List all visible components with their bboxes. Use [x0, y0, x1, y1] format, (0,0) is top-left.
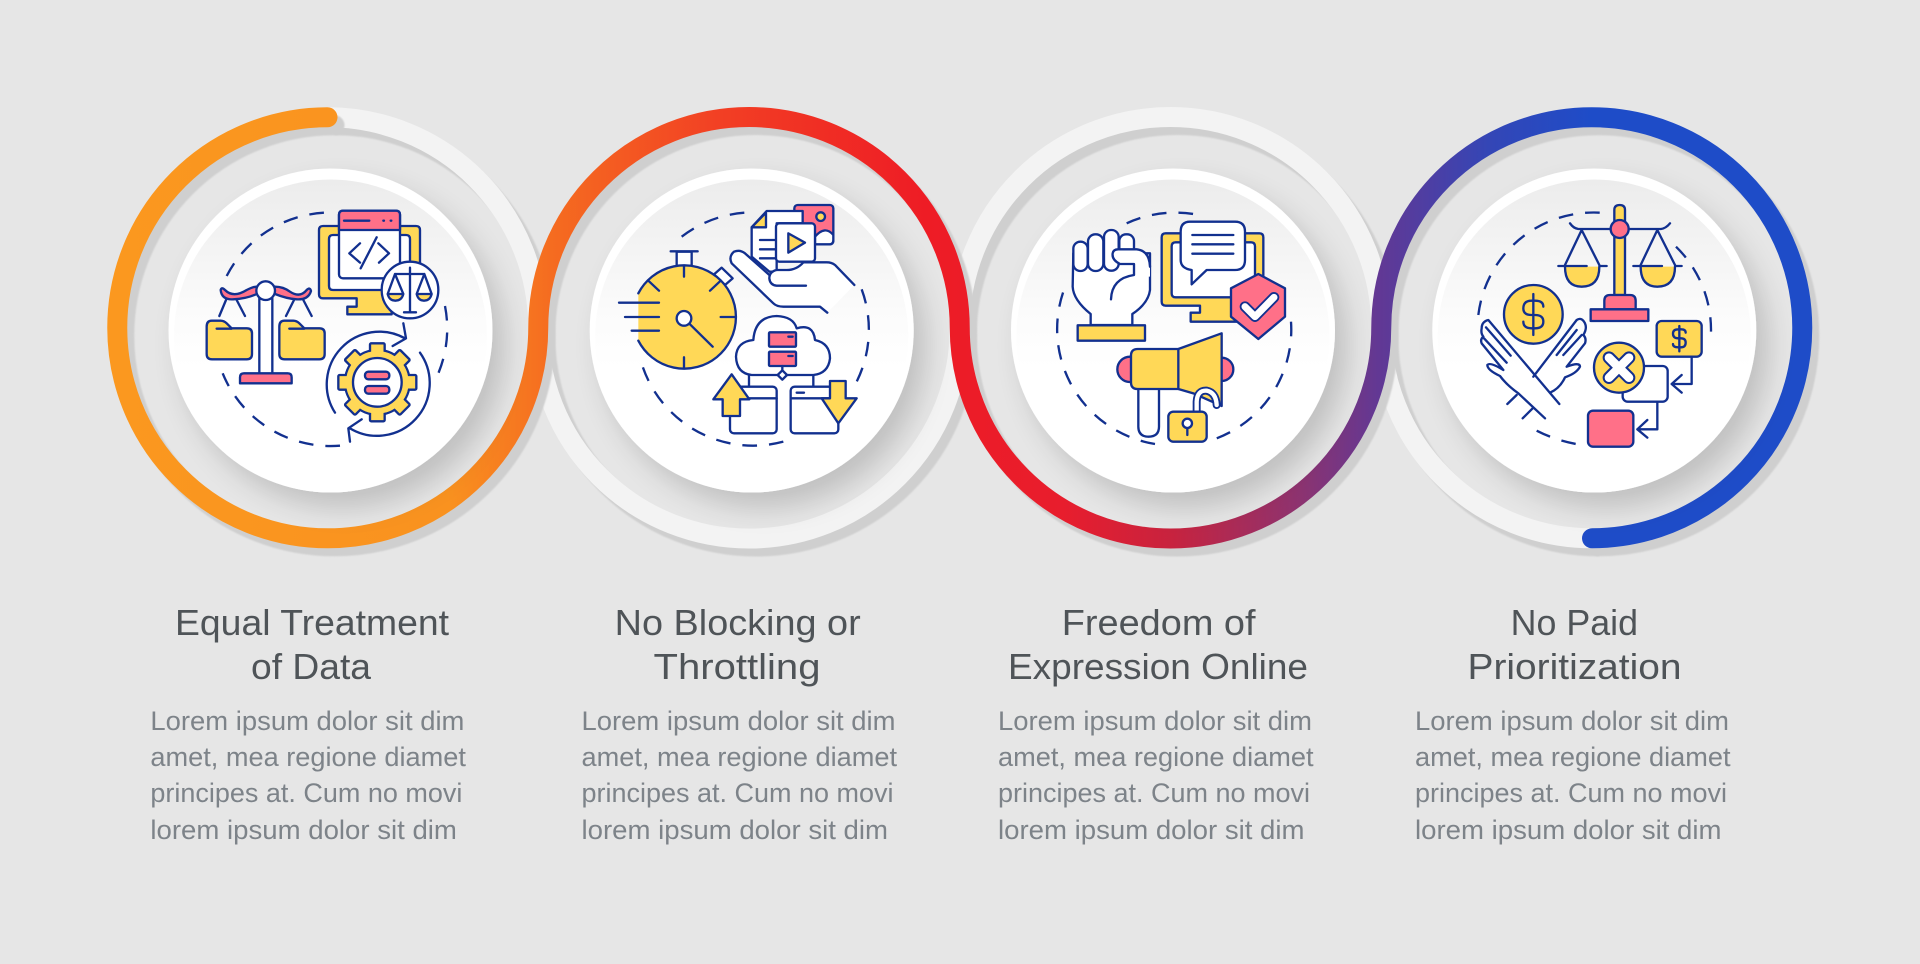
heading [175, 602, 449, 687]
body text [150, 706, 466, 845]
heading [1468, 602, 1682, 687]
body text [998, 706, 1314, 845]
body text: lorem ipsum dolor sit dim [1415, 815, 1722, 845]
heading: Equal Treatment [175, 602, 449, 643]
looping ring track and gradient line [117, 117, 1809, 547]
body text: amet, mea regione diamet [998, 742, 1314, 772]
white disc [1011, 168, 1335, 492]
icon: scales, computer code and gear [207, 211, 447, 446]
panel: no blocking or throttling [582, 168, 914, 845]
icon: stopwatch, media in hand and cloud storage [619, 205, 869, 446]
body text: principes at. Cum no movi [1415, 778, 1727, 808]
heading: No Blocking or [615, 602, 861, 643]
panel: equal treatment of data [150, 168, 492, 845]
body text: lorem ipsum dolor sit dim [150, 815, 457, 845]
white disc [1432, 168, 1756, 492]
heading: of Data [251, 646, 372, 687]
icon: raised fist, monitor with shield and megaphone [1057, 213, 1291, 444]
icon: balance, dollar coin, crossed hands and flow boxes [1478, 205, 1711, 447]
body text [582, 706, 897, 845]
body text [1415, 706, 1731, 845]
heading [1008, 602, 1308, 687]
heading: Prioritization [1468, 646, 1682, 687]
heading: Throttling [654, 646, 820, 687]
body text: Lorem ipsum dolor sit dim [998, 706, 1312, 736]
body text: lorem ipsum dolor sit dim [998, 815, 1304, 845]
body text: Lorem ipsum dolor sit dim [1415, 706, 1729, 736]
heading [615, 602, 861, 687]
heading: No Paid [1511, 602, 1638, 643]
heading: Freedom of [1062, 602, 1257, 643]
body text: principes at. Cum no movi [150, 778, 462, 808]
body text: principes at. Cum no movi [582, 778, 894, 808]
white disc [590, 168, 914, 492]
panel: no paid prioritization [1415, 168, 1756, 845]
panel: freedom of expression online [998, 168, 1335, 845]
body text: amet, mea regione diamet [150, 742, 466, 772]
heading: Expression Online [1008, 646, 1308, 687]
body text: amet, mea regione diamet [582, 742, 897, 772]
body text: Lorem ipsum dolor sit dim [582, 706, 896, 736]
white disc [168, 168, 492, 492]
body text: Lorem ipsum dolor sit dim [150, 706, 464, 736]
body text: principes at. Cum no movi [998, 778, 1310, 808]
body text: lorem ipsum dolor sit dim [582, 815, 888, 845]
body text: amet, mea regione diamet [1415, 742, 1731, 772]
